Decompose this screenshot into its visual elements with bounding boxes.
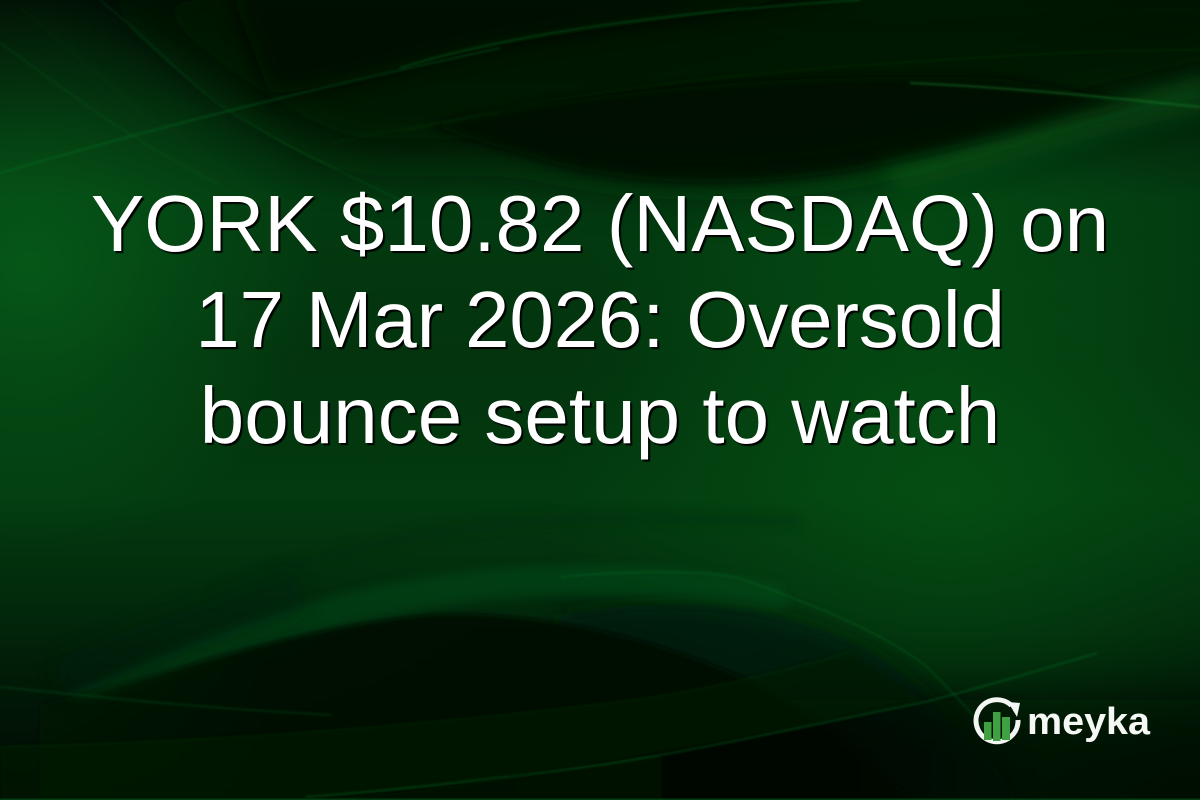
dark lens under the top curve [430,77,1140,182]
icon: circular arrow with bars [976,700,1020,742]
title: 17 Mar 2026: Oversold [195,275,1005,364]
logo: meyka [974,697,1151,744]
bottom edge line [0,798,1200,800]
title: YORK $10.82 (NASDAQ) on [91,179,1109,268]
title: bounce setup to watch [200,371,1000,460]
dark curved bands above the light band [210,517,800,600]
upper right light band [880,72,1200,190]
title [91,179,1109,462]
bottom light band [66,566,790,700]
dark central hump [40,614,920,800]
wordmark: meyka [1027,701,1151,743]
region between lower curves [0,653,925,800]
soft dark area right of the lower hump [560,604,1020,800]
darkest bottom wedge [306,690,1200,800]
top dark mass [100,0,1200,181]
soft dark bottom right [780,700,1200,800]
dark region above the bright top edge [230,0,860,95]
